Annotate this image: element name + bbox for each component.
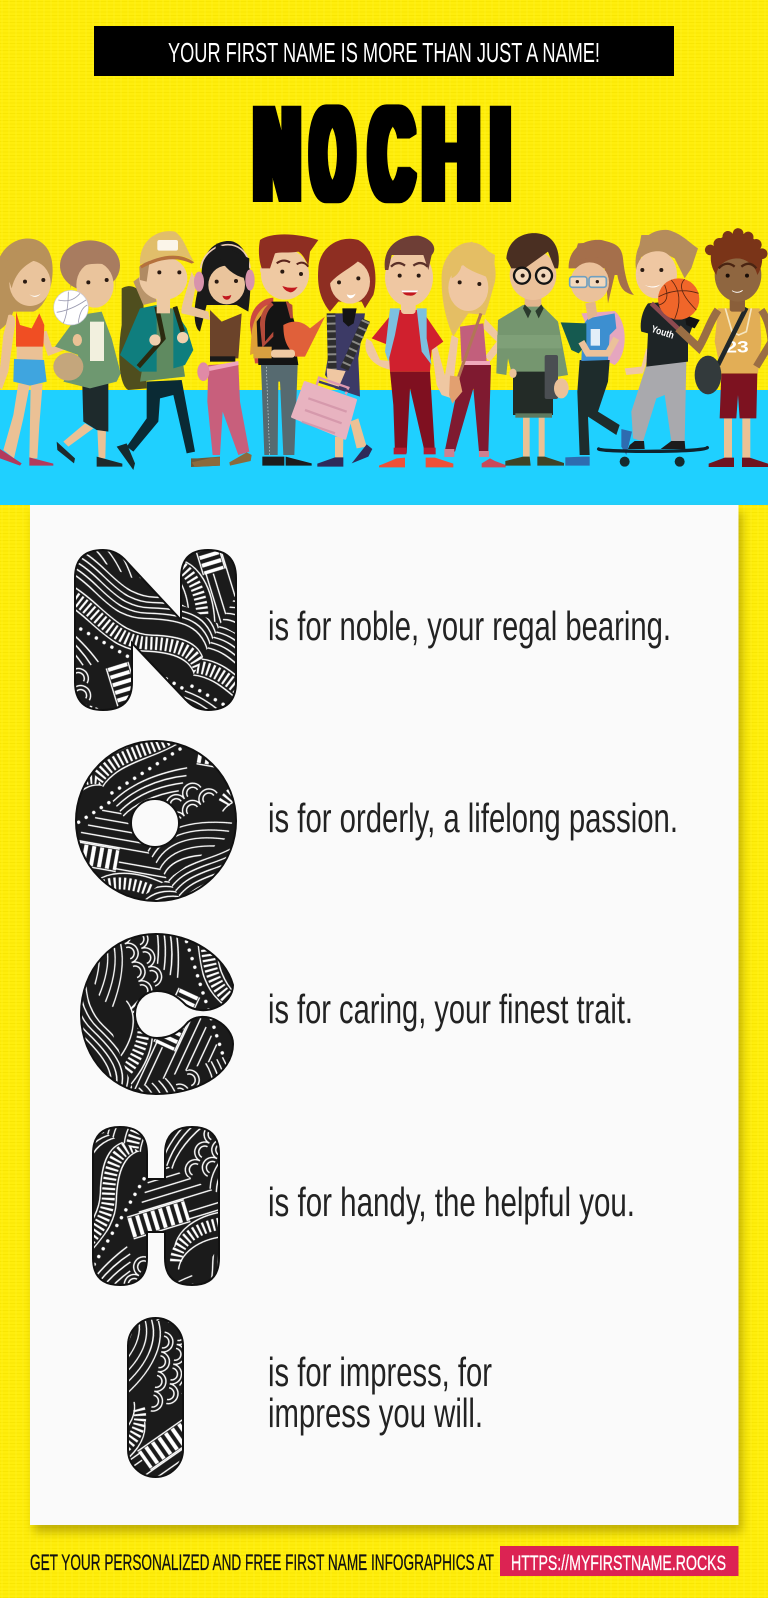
text: C meaning: is for caring, your finest trait. xyxy=(268,986,633,1032)
title: C xyxy=(370,80,413,229)
letter H row xyxy=(93,1127,635,1285)
letter C row xyxy=(81,934,633,1094)
figure: girl in orange top xyxy=(0,238,77,466)
panel: letters shadow xyxy=(34,512,742,1532)
icon: patterned letter N xyxy=(75,550,236,710)
figure: girl with tablet xyxy=(561,240,634,466)
infographic: I xyxy=(492,80,509,229)
icon: patterned letter O xyxy=(76,741,236,901)
text: I meaning: impress you will. xyxy=(268,1390,483,1436)
figure: boy in jersey with bag: 23 xyxy=(725,337,749,356)
title: N xyxy=(255,80,300,229)
figure: blonde girl xyxy=(442,242,507,467)
figure: girl with headphones xyxy=(181,241,255,467)
footer call to action: GET YOUR PERSONALIZED AND FREE FIRST NAME INFOGRAPHICS AT xyxy=(30,1550,494,1575)
text: I meaning: is for impress, for xyxy=(268,1349,492,1395)
title: O xyxy=(312,80,353,229)
ground band xyxy=(0,390,768,505)
letter I row xyxy=(128,1318,492,1477)
footer xyxy=(30,1546,738,1576)
figure: boy in jersey with bag xyxy=(678,228,768,467)
letter N row xyxy=(75,550,671,710)
text: H meaning: is for handy, the helpful you. xyxy=(268,1179,635,1225)
figure: boy with book xyxy=(250,234,325,466)
figure: boy with glasses xyxy=(496,233,569,466)
icon: patterned letter H xyxy=(93,1127,219,1285)
figure: boy on skateboard with basketball xyxy=(599,230,707,467)
illustration: group of twelve young people xyxy=(0,228,768,470)
footer url button xyxy=(500,1546,738,1576)
title: H xyxy=(422,80,480,229)
letter O row xyxy=(76,741,678,901)
figure: girl with pink bag xyxy=(292,239,375,467)
right figures xyxy=(496,228,768,467)
left figures xyxy=(0,231,255,470)
title xyxy=(255,80,509,229)
top banner xyxy=(94,26,674,76)
icon: patterned letter I xyxy=(128,1318,183,1477)
icon: patterned letter C xyxy=(81,934,233,1094)
icon: basketball xyxy=(658,278,699,320)
figure: boy with backpack and cap xyxy=(117,231,220,470)
figure: girl with volleyball xyxy=(53,240,122,467)
panel: letters and meanings xyxy=(30,505,738,1525)
figure: boy on skateboard with basketball: Youth xyxy=(650,324,675,342)
figure: boy in red t-shirt xyxy=(365,236,453,467)
middle figures xyxy=(250,234,507,467)
